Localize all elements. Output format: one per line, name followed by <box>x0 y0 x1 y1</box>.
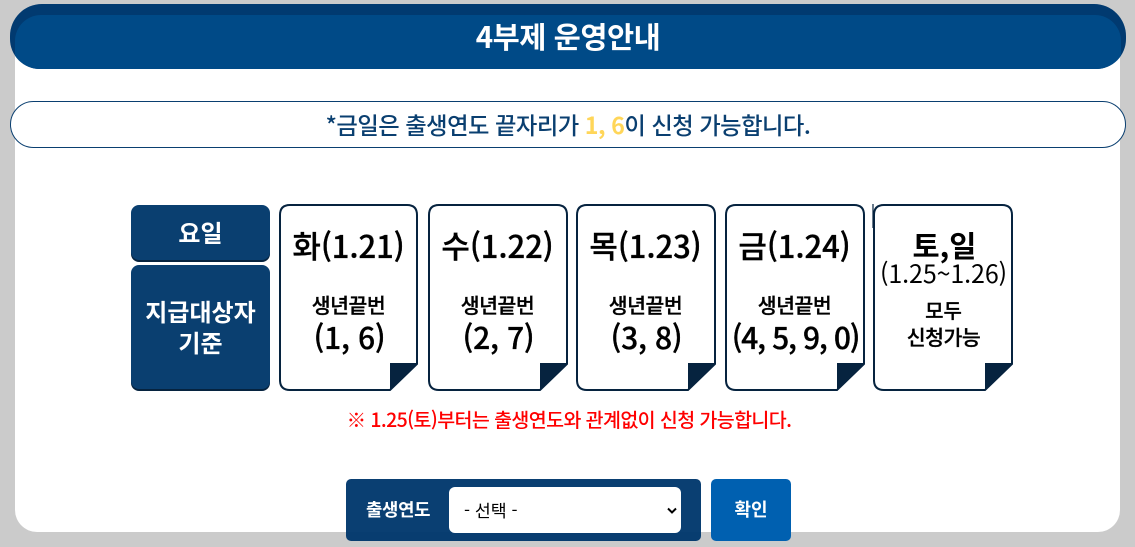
confirm button <box>711 479 791 541</box>
card: Tuesday: 생년끝번 <box>312 289 385 319</box>
birth year selector bar <box>346 479 701 541</box>
card: Wednesday: 수(1.22) <box>441 222 554 267</box>
title banner: 4부제 운영안내 <box>476 15 660 57</box>
card: Thursday: 목(1.23) <box>589 222 702 267</box>
notice pill: *금일은 출생연도 끝자리가 1, 6이 신청 가능합니다. <box>326 107 810 141</box>
card: Friday: 금(1.24) <box>738 222 851 267</box>
row label: eligibility <box>131 265 270 389</box>
card: Thursday: (3, 8) <box>611 314 682 358</box>
card: Thursday <box>576 204 716 391</box>
dropdown: - 선택 - <box>464 497 518 522</box>
red notice: ※ 1.25(토)부터는 출생연도와 관계없이 신청 가능합니다. <box>347 404 791 433</box>
card: Friday: (4, 5, 9, 0) <box>732 314 859 358</box>
row label: eligibility: 지급대상자 <box>145 293 256 328</box>
card: Tuesday <box>279 204 418 391</box>
card: Wednesday: 생년끝번 <box>461 289 534 319</box>
card: Tuesday: (1, 6) <box>314 314 385 358</box>
confirm button: 확인 <box>734 496 768 522</box>
selector label: 출생연도 <box>366 496 430 522</box>
notice pill <box>10 101 1126 148</box>
card: weekend: 토,일 <box>913 224 976 266</box>
card: weekend <box>872 204 1013 391</box>
icon: dropdown chevron <box>667 508 677 514</box>
card: Wednesday: (2, 7) <box>463 314 534 358</box>
title banner <box>10 4 1126 69</box>
card: Friday <box>725 204 865 391</box>
row label: day: 요일 <box>178 214 223 249</box>
row label: day <box>131 205 270 260</box>
card: Friday: 생년끝번 <box>758 289 831 319</box>
card: weekend: 모두 <box>925 295 962 324</box>
card: Wednesday <box>428 204 568 391</box>
row label: eligibility: 기준 <box>178 324 223 359</box>
dropdown <box>449 487 681 533</box>
card: Thursday: 생년끝번 <box>609 289 682 319</box>
card: Tuesday: 화(1.21) <box>292 222 405 267</box>
card: weekend: (1.25~1.26) <box>880 255 1007 291</box>
card: weekend: 신청가능 <box>907 321 980 351</box>
